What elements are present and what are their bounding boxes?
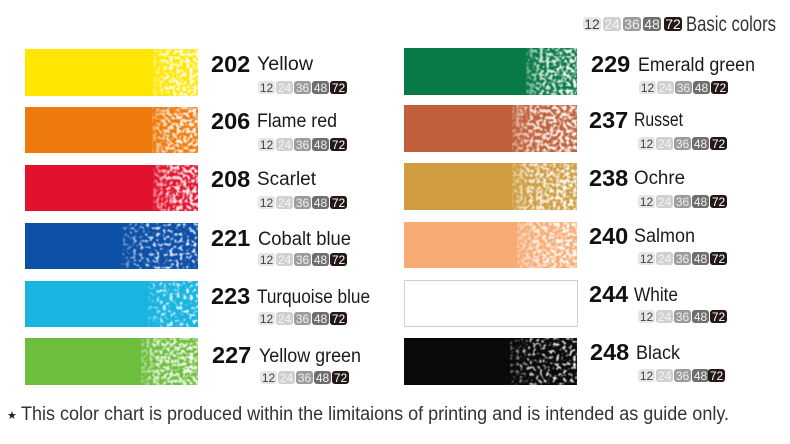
row: 221 Cobalt blue (25, 223, 351, 269)
name Salmon: Salmon (634, 226, 695, 247)
availability badges: 24 (280, 371, 293, 385)
availability badges: 24 (659, 81, 672, 95)
row: 227 Yellow green (25, 338, 361, 385)
availability badges: 48 (694, 369, 707, 383)
availability badges: 48 (694, 252, 707, 266)
availability badges: 36 (677, 81, 690, 95)
availability badges: 48 (316, 371, 329, 385)
row: 202 Yellow (25, 49, 347, 96)
availability badges: 48 (694, 195, 707, 209)
swatch: flame red (25, 107, 198, 153)
row: 206 Flame red (25, 107, 347, 153)
availability badges: 48 (694, 310, 707, 324)
availability badges: 36 (676, 195, 689, 209)
availability badges: 12 (260, 196, 273, 210)
availability badges: 24 (658, 137, 671, 151)
name Yellow green: Yellow green (259, 346, 361, 367)
number 208: 208 (211, 166, 250, 192)
number 221: 221 (211, 225, 250, 251)
availability badges: 24 (658, 369, 671, 383)
availability badges: 72 (713, 81, 726, 95)
name Cobalt blue: Cobalt blue (258, 229, 351, 250)
availability badges: 36 (298, 371, 311, 385)
swatch: scarlet (25, 165, 198, 211)
availability badges: 48 (314, 253, 327, 267)
availability badges: 72 (712, 310, 725, 324)
swatch: russet (404, 105, 577, 152)
availability badges (638, 195, 727, 209)
availability badges: 12 (640, 195, 653, 209)
availability badges: 24 (658, 195, 671, 209)
legend: basic colors: 72 (665, 16, 681, 32)
number 244: 244 (589, 281, 628, 307)
name Flame red: Flame red (257, 111, 337, 132)
row: 238 Ochre (404, 163, 727, 210)
availability badges: 36 (676, 369, 689, 383)
number 248: 248 (590, 339, 629, 365)
swatch: black (404, 338, 577, 385)
availability badges: 24 (278, 253, 291, 267)
availability badges: 72 (710, 369, 723, 383)
swatch: ochre (404, 163, 577, 210)
availability badges: 72 (332, 138, 345, 152)
availability badges: 48 (314, 81, 327, 95)
swatch: white (404, 280, 578, 326)
legend: basic colors: 48 (644, 16, 660, 32)
availability badges: 72 (332, 312, 345, 326)
footnote: ★ (7, 410, 17, 422)
availability badges: 12 (260, 253, 273, 267)
availability badges: 24 (658, 310, 671, 324)
availability badges: 36 (296, 81, 309, 95)
availability badges: 24 (278, 138, 291, 152)
row: 237 Russet (404, 105, 727, 152)
availability badges (260, 371, 349, 385)
availability badges (258, 138, 347, 152)
availability badges (258, 81, 347, 95)
availability badges: 12 (640, 252, 653, 266)
swatch: turquoise blue (25, 281, 198, 327)
availability badges: 36 (676, 310, 689, 324)
name Emerald green: Emerald green (638, 55, 755, 76)
availability badges: 12 (640, 369, 653, 383)
availability badges: 72 (332, 196, 345, 210)
row: 240 Salmon (404, 222, 727, 268)
name Ochre: Ochre (634, 168, 685, 189)
availability badges: 24 (278, 312, 291, 326)
number 202: 202 (211, 51, 250, 77)
availability badges: 36 (296, 196, 309, 210)
swatch: yellow (25, 49, 198, 96)
row: 248 Black (404, 338, 725, 385)
number 229: 229 (591, 51, 630, 77)
name Russet: Russet (634, 110, 684, 131)
availability badges: 12 (641, 81, 654, 95)
availability badges: 12 (260, 138, 273, 152)
number 206: 206 (211, 108, 250, 134)
swatch: salmon (404, 222, 577, 268)
availability badges: 24 (278, 196, 291, 210)
availability badges: 48 (694, 137, 707, 151)
legend: basic colors: 24 (604, 16, 620, 32)
availability badges: 12 (640, 310, 653, 324)
availability badges: 72 (712, 195, 725, 209)
swatch: emerald green (404, 48, 577, 95)
availability badges: 36 (296, 253, 309, 267)
row: 244 White (404, 280, 727, 326)
swatch: yellow green (25, 338, 198, 385)
row: 229 Emerald green (404, 48, 755, 95)
availability badges (638, 369, 725, 383)
availability badges: 48 (314, 138, 327, 152)
legend: basic colors: 36 (624, 16, 640, 32)
availability badges: 12 (262, 371, 275, 385)
name White: White (634, 285, 678, 306)
legend: basic colors: 12 (584, 16, 600, 32)
availability badges: 12 (260, 81, 273, 95)
availability badges (638, 137, 727, 151)
availability badges: 12 (260, 312, 273, 326)
number 237: 237 (589, 107, 628, 133)
availability badges: 72 (712, 252, 725, 266)
availability badges: 36 (296, 312, 309, 326)
name Yellow: Yellow (257, 54, 313, 75)
availability badges (638, 252, 727, 266)
row: 208 Scarlet (25, 165, 347, 211)
footnote: This color chart is produced within the limitaions of printing and is intended as guide only. (21, 404, 729, 425)
legend: basic colors (583, 13, 776, 36)
availability badges (258, 196, 347, 210)
availability badges: 72 (712, 137, 725, 151)
availability badges (258, 312, 347, 326)
availability badges (639, 81, 728, 95)
number 223: 223 (211, 283, 250, 309)
availability badges: 24 (278, 81, 291, 95)
availability badges: 72 (332, 81, 345, 95)
swatch: cobalt blue (25, 223, 198, 269)
availability badges: 36 (676, 252, 689, 266)
availability badges: 36 (296, 138, 309, 152)
name Turquoise blue: Turquoise blue (257, 287, 370, 308)
availability badges: 48 (695, 81, 708, 95)
availability badges (258, 253, 347, 267)
availability badges: 48 (314, 196, 327, 210)
availability badges: 12 (640, 137, 653, 151)
availability badges (638, 310, 727, 324)
availability badges: 36 (676, 137, 689, 151)
name Black: Black (636, 343, 680, 364)
availability badges: 72 (334, 371, 347, 385)
availability badges: 48 (314, 312, 327, 326)
row: 223 Turquoise blue (25, 281, 370, 327)
name Scarlet: Scarlet (257, 169, 317, 190)
availability badges: 24 (658, 252, 671, 266)
availability badges: 72 (332, 253, 345, 267)
number 238: 238 (589, 165, 628, 191)
number 240: 240 (589, 223, 628, 249)
number 227: 227 (212, 342, 251, 368)
